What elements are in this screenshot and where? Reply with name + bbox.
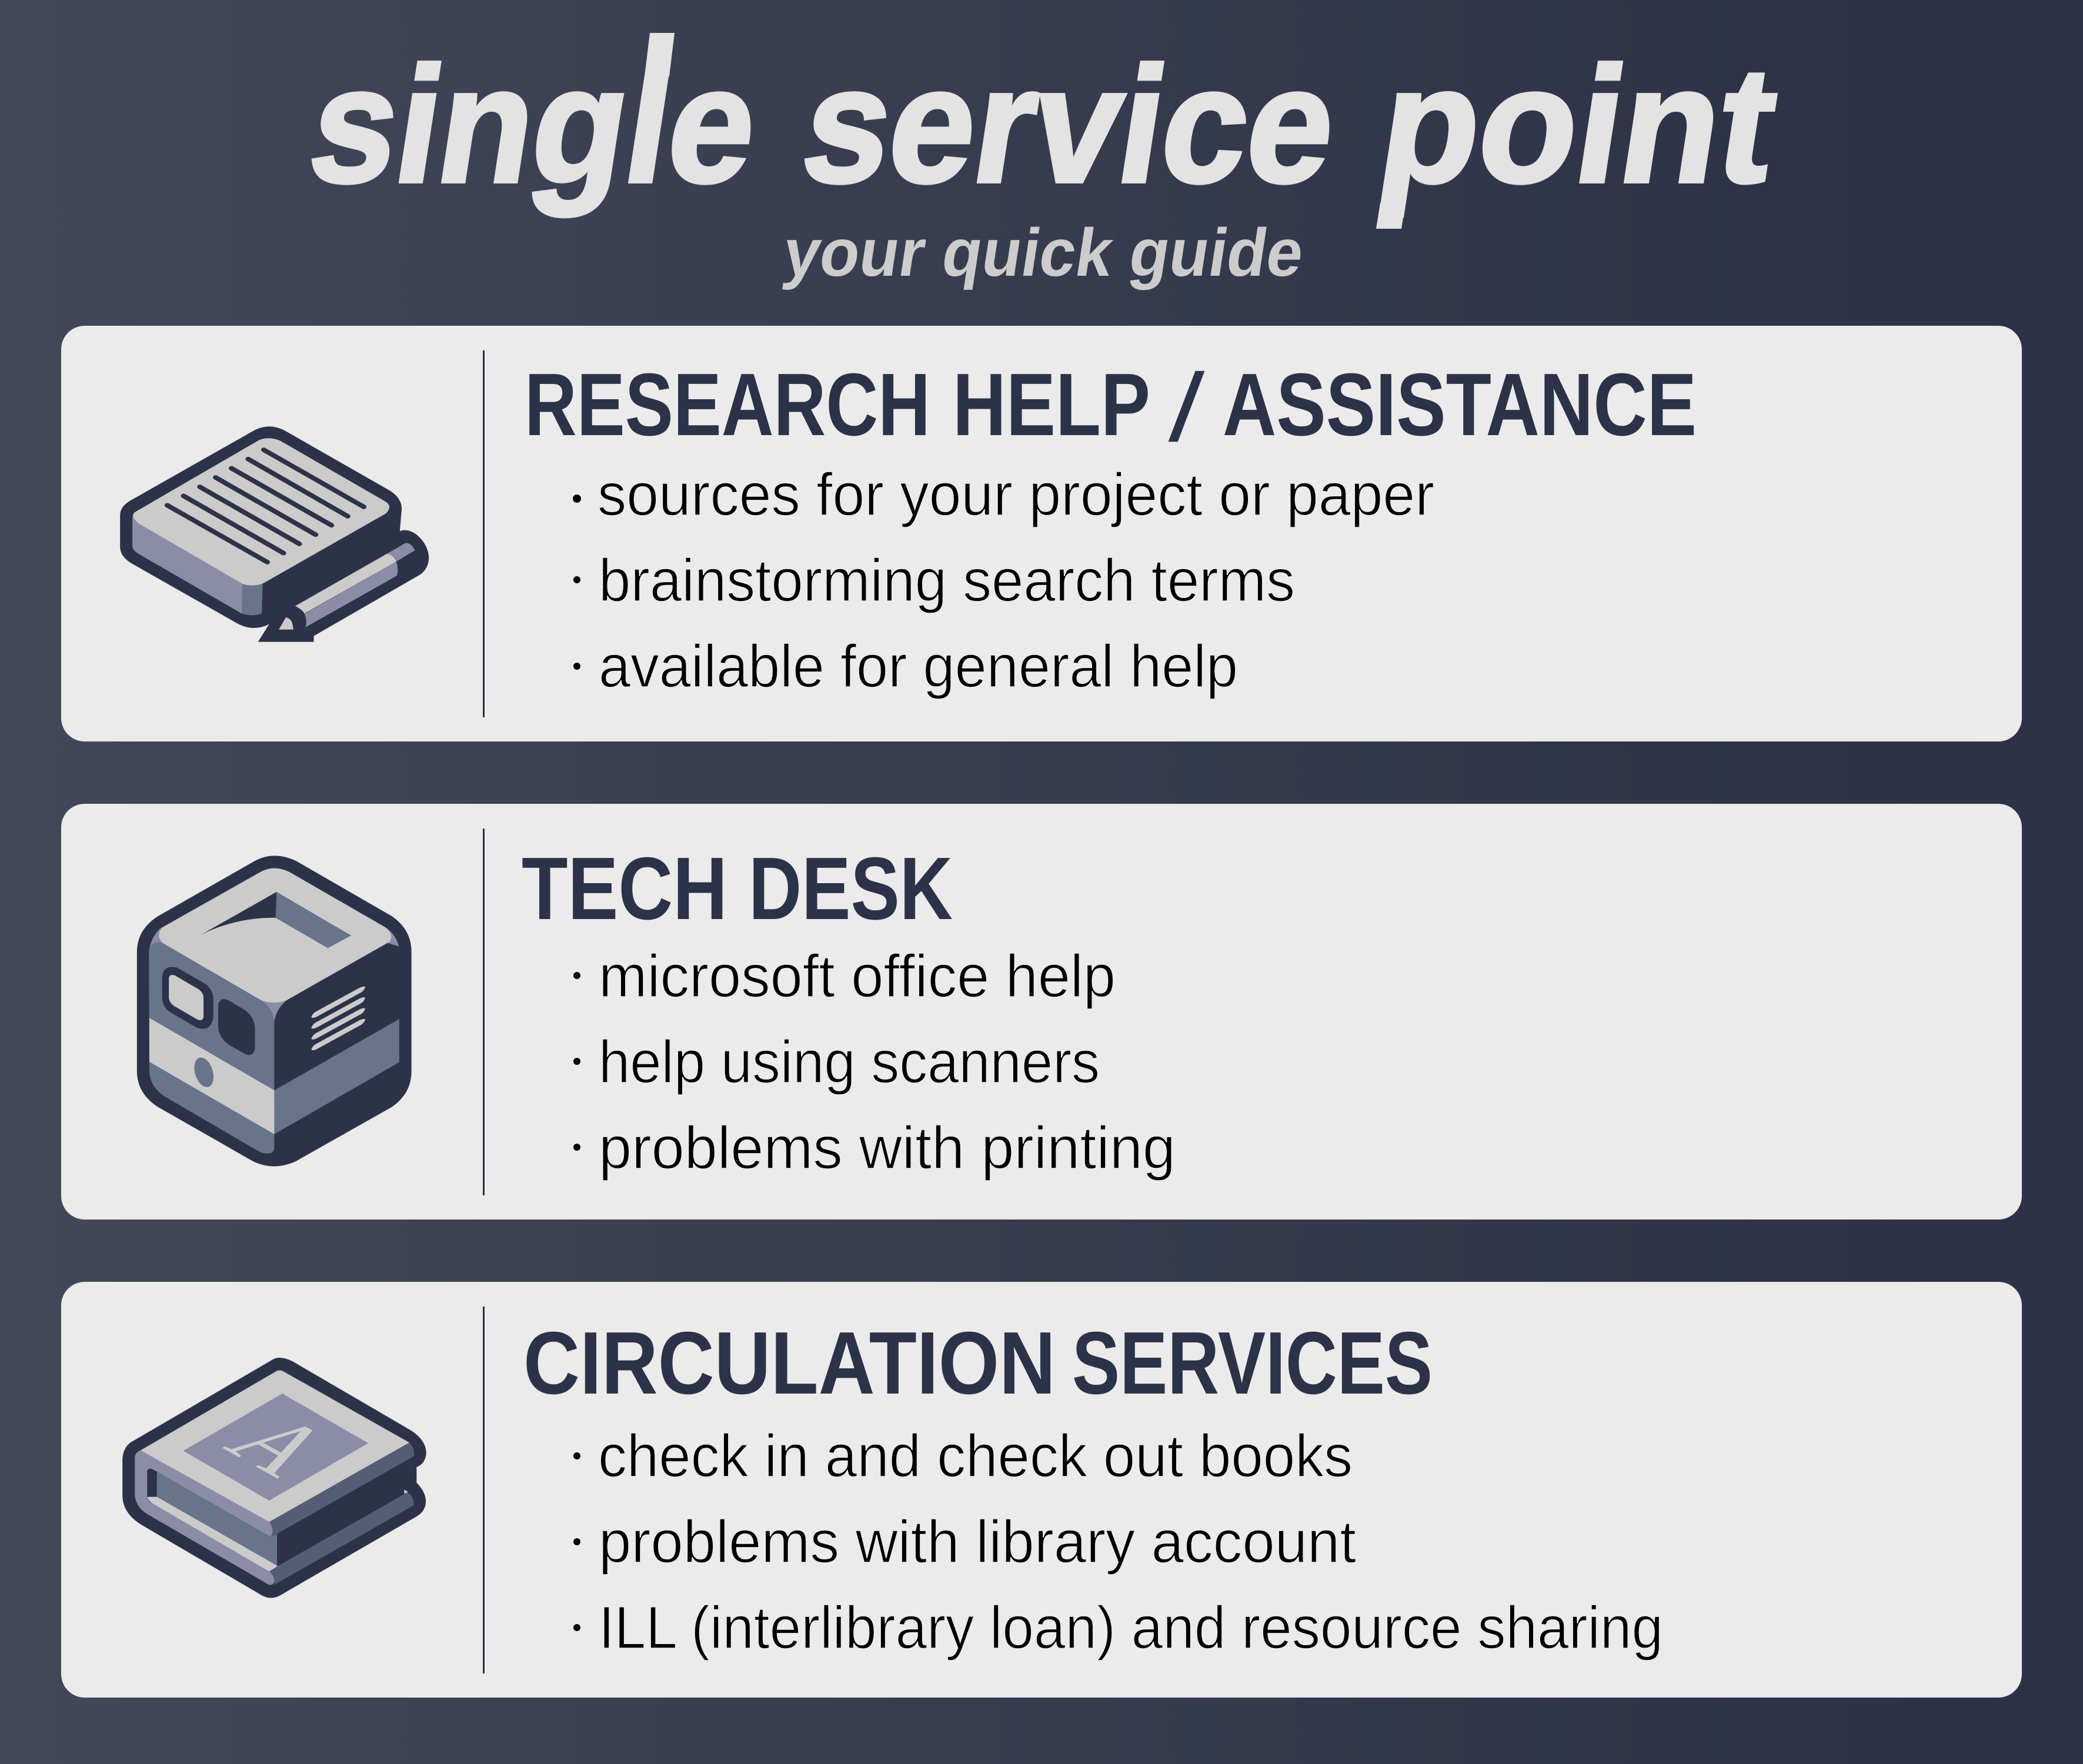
- heading: research help: ASSISTANCE: [1223, 355, 1697, 454]
- list: circulation items: [573, 1422, 1663, 1661]
- heading: tech desk: [522, 838, 953, 938]
- list: circulation items: problems with library account: [599, 1508, 1356, 1575]
- panel: research help: [61, 326, 2022, 741]
- heading: tech desk: TECH: [522, 838, 727, 938]
- list: tech desk items: microsoft office help: [599, 943, 1116, 1010]
- title: single: [299, 32, 770, 218]
- list: research help items: available for general help: [599, 633, 1238, 700]
- list: tech desk items: problems with printing: [599, 1114, 1176, 1181]
- list: research help items: [573, 461, 1434, 700]
- heading: circulation services: CIRCULATION: [523, 1313, 1056, 1412]
- icon: closed book: [122, 1358, 426, 1598]
- title: [299, 32, 1788, 229]
- panel: tech desk: [61, 804, 2022, 1220]
- list: tech desk items: [573, 943, 1176, 1181]
- heading: research help: RESEARCH: [525, 355, 930, 454]
- heading: tech desk: DESK: [749, 838, 953, 938]
- subtitle: your quick guide: [779, 215, 1309, 290]
- list: research help items: brainstorming search terms: [599, 547, 1295, 614]
- list: tech desk items: help using scanners: [599, 1028, 1100, 1095]
- heading: research help: [525, 355, 1697, 460]
- list: circulation items: ILL (interlibrary loan) and resource sharing: [599, 1594, 1663, 1661]
- icon: closed book: A: [202, 1401, 359, 1490]
- title: service: [792, 32, 1348, 217]
- list: research help items: sources for your project or paper: [597, 461, 1434, 528]
- list: circulation items: check in and check out books: [598, 1422, 1353, 1489]
- icon: open book with pencil: [120, 426, 429, 642]
- heading: research help: /: [1163, 355, 1209, 460]
- icon: printer: [137, 856, 412, 1166]
- heading: circulation services: [523, 1313, 1433, 1412]
- heading: circulation services: SERVICES: [1072, 1313, 1433, 1412]
- title: point: [1369, 32, 1788, 218]
- panel: circulation services: [61, 1282, 2022, 1698]
- heading: research help: HELP: [953, 355, 1150, 454]
